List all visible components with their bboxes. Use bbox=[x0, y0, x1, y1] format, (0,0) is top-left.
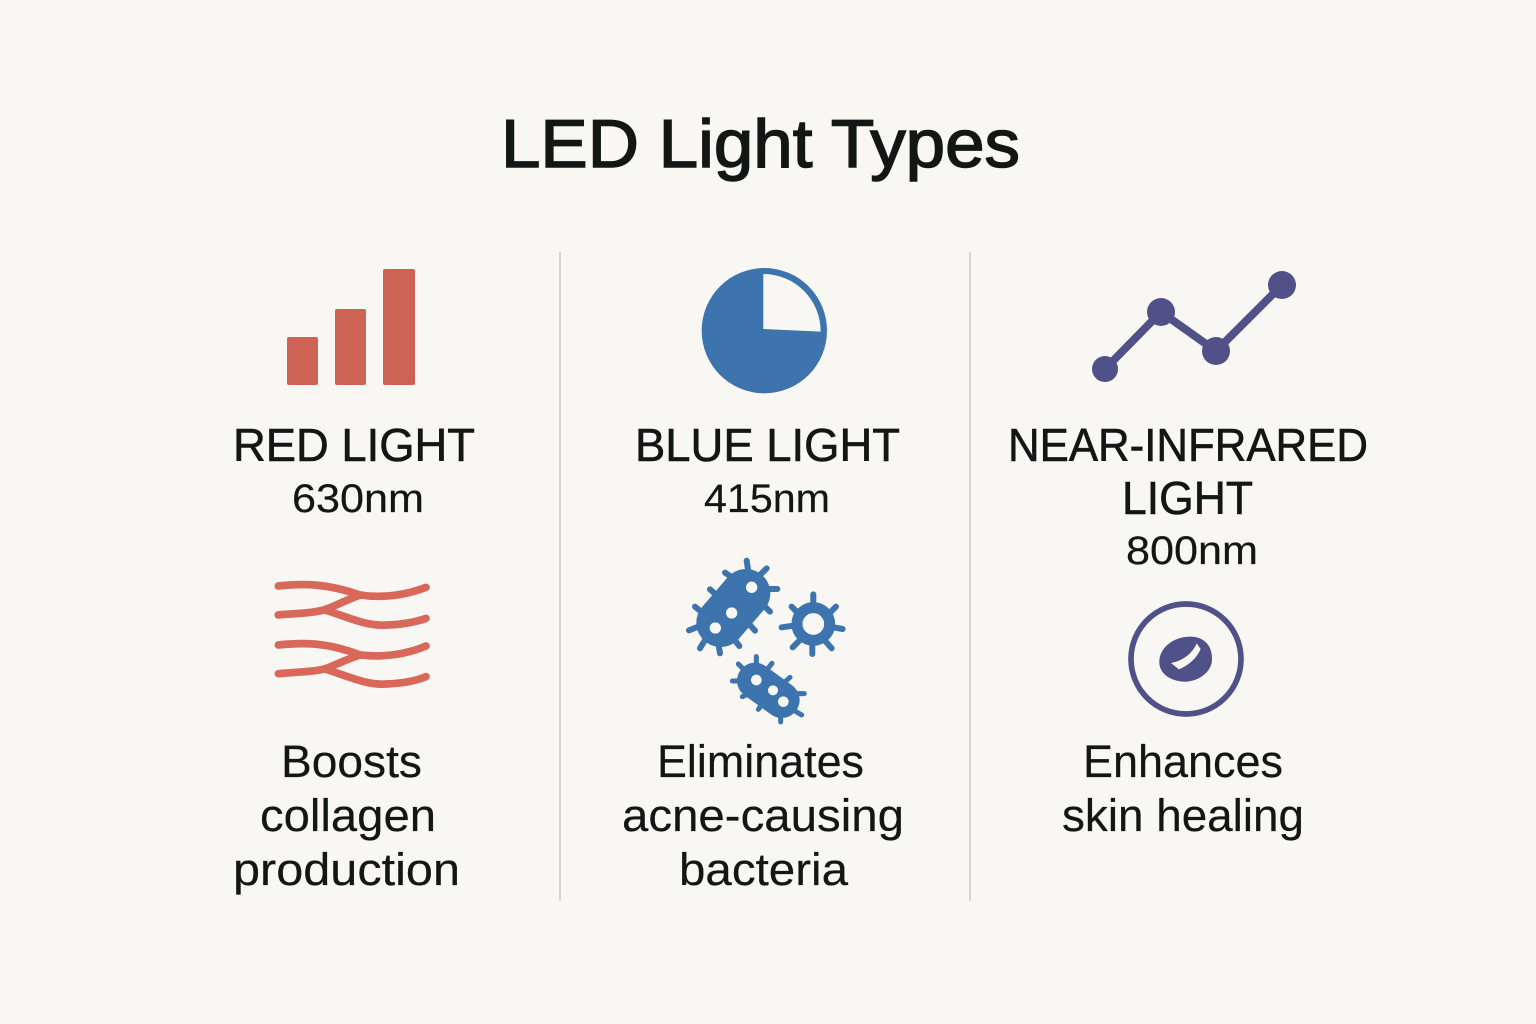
benefit: enhances skin healing: Enhances bbox=[1083, 736, 1283, 787]
benefit: eliminates acne-causing bacteria: Eliminates bbox=[657, 736, 864, 787]
icon: red bar chart bbox=[287, 269, 415, 385]
heading: near-infrared light: LIGHT bbox=[1122, 472, 1253, 524]
benefit: eliminates acne-causing bacteria bbox=[622, 736, 904, 895]
icon: blue pie chart bbox=[702, 268, 827, 393]
icon: collagen fibers bbox=[278, 585, 426, 684]
panel: red light bbox=[233, 269, 475, 895]
icon: purple line chart bbox=[1092, 271, 1296, 382]
benefit: boosts collagen production: production bbox=[233, 844, 460, 895]
benefit: boosts collagen production: Boosts bbox=[281, 736, 422, 787]
panel: near-infrared light bbox=[1008, 271, 1368, 841]
wavelength: 415nm: 415nm bbox=[704, 477, 830, 521]
benefit: boosts collagen production bbox=[233, 736, 460, 895]
icon: bacteria bbox=[689, 561, 843, 722]
benefit: boosts collagen production: collagen bbox=[260, 790, 436, 841]
benefit: eliminates acne-causing bacteria: bacteria bbox=[679, 844, 849, 895]
heading: near-infrared light bbox=[1008, 419, 1368, 524]
benefit: eliminates acne-causing bacteria: acne-causing bbox=[622, 790, 904, 841]
heading: red light: RED LIGHT bbox=[233, 419, 475, 471]
heading: blue light: BLUE LIGHT bbox=[635, 419, 900, 471]
wavelength: 630nm: 630nm bbox=[292, 477, 424, 521]
icon: skin cell bbox=[1131, 604, 1241, 714]
benefit: enhances skin healing bbox=[1062, 736, 1304, 841]
title: LED Light Types bbox=[501, 106, 1020, 182]
panel: blue light bbox=[622, 268, 904, 895]
wavelength: 800nm: 800nm bbox=[1126, 529, 1258, 573]
heading: near-infrared light: NEAR-INFRARED bbox=[1008, 419, 1368, 471]
benefit: enhances skin healing: skin healing bbox=[1062, 790, 1304, 841]
